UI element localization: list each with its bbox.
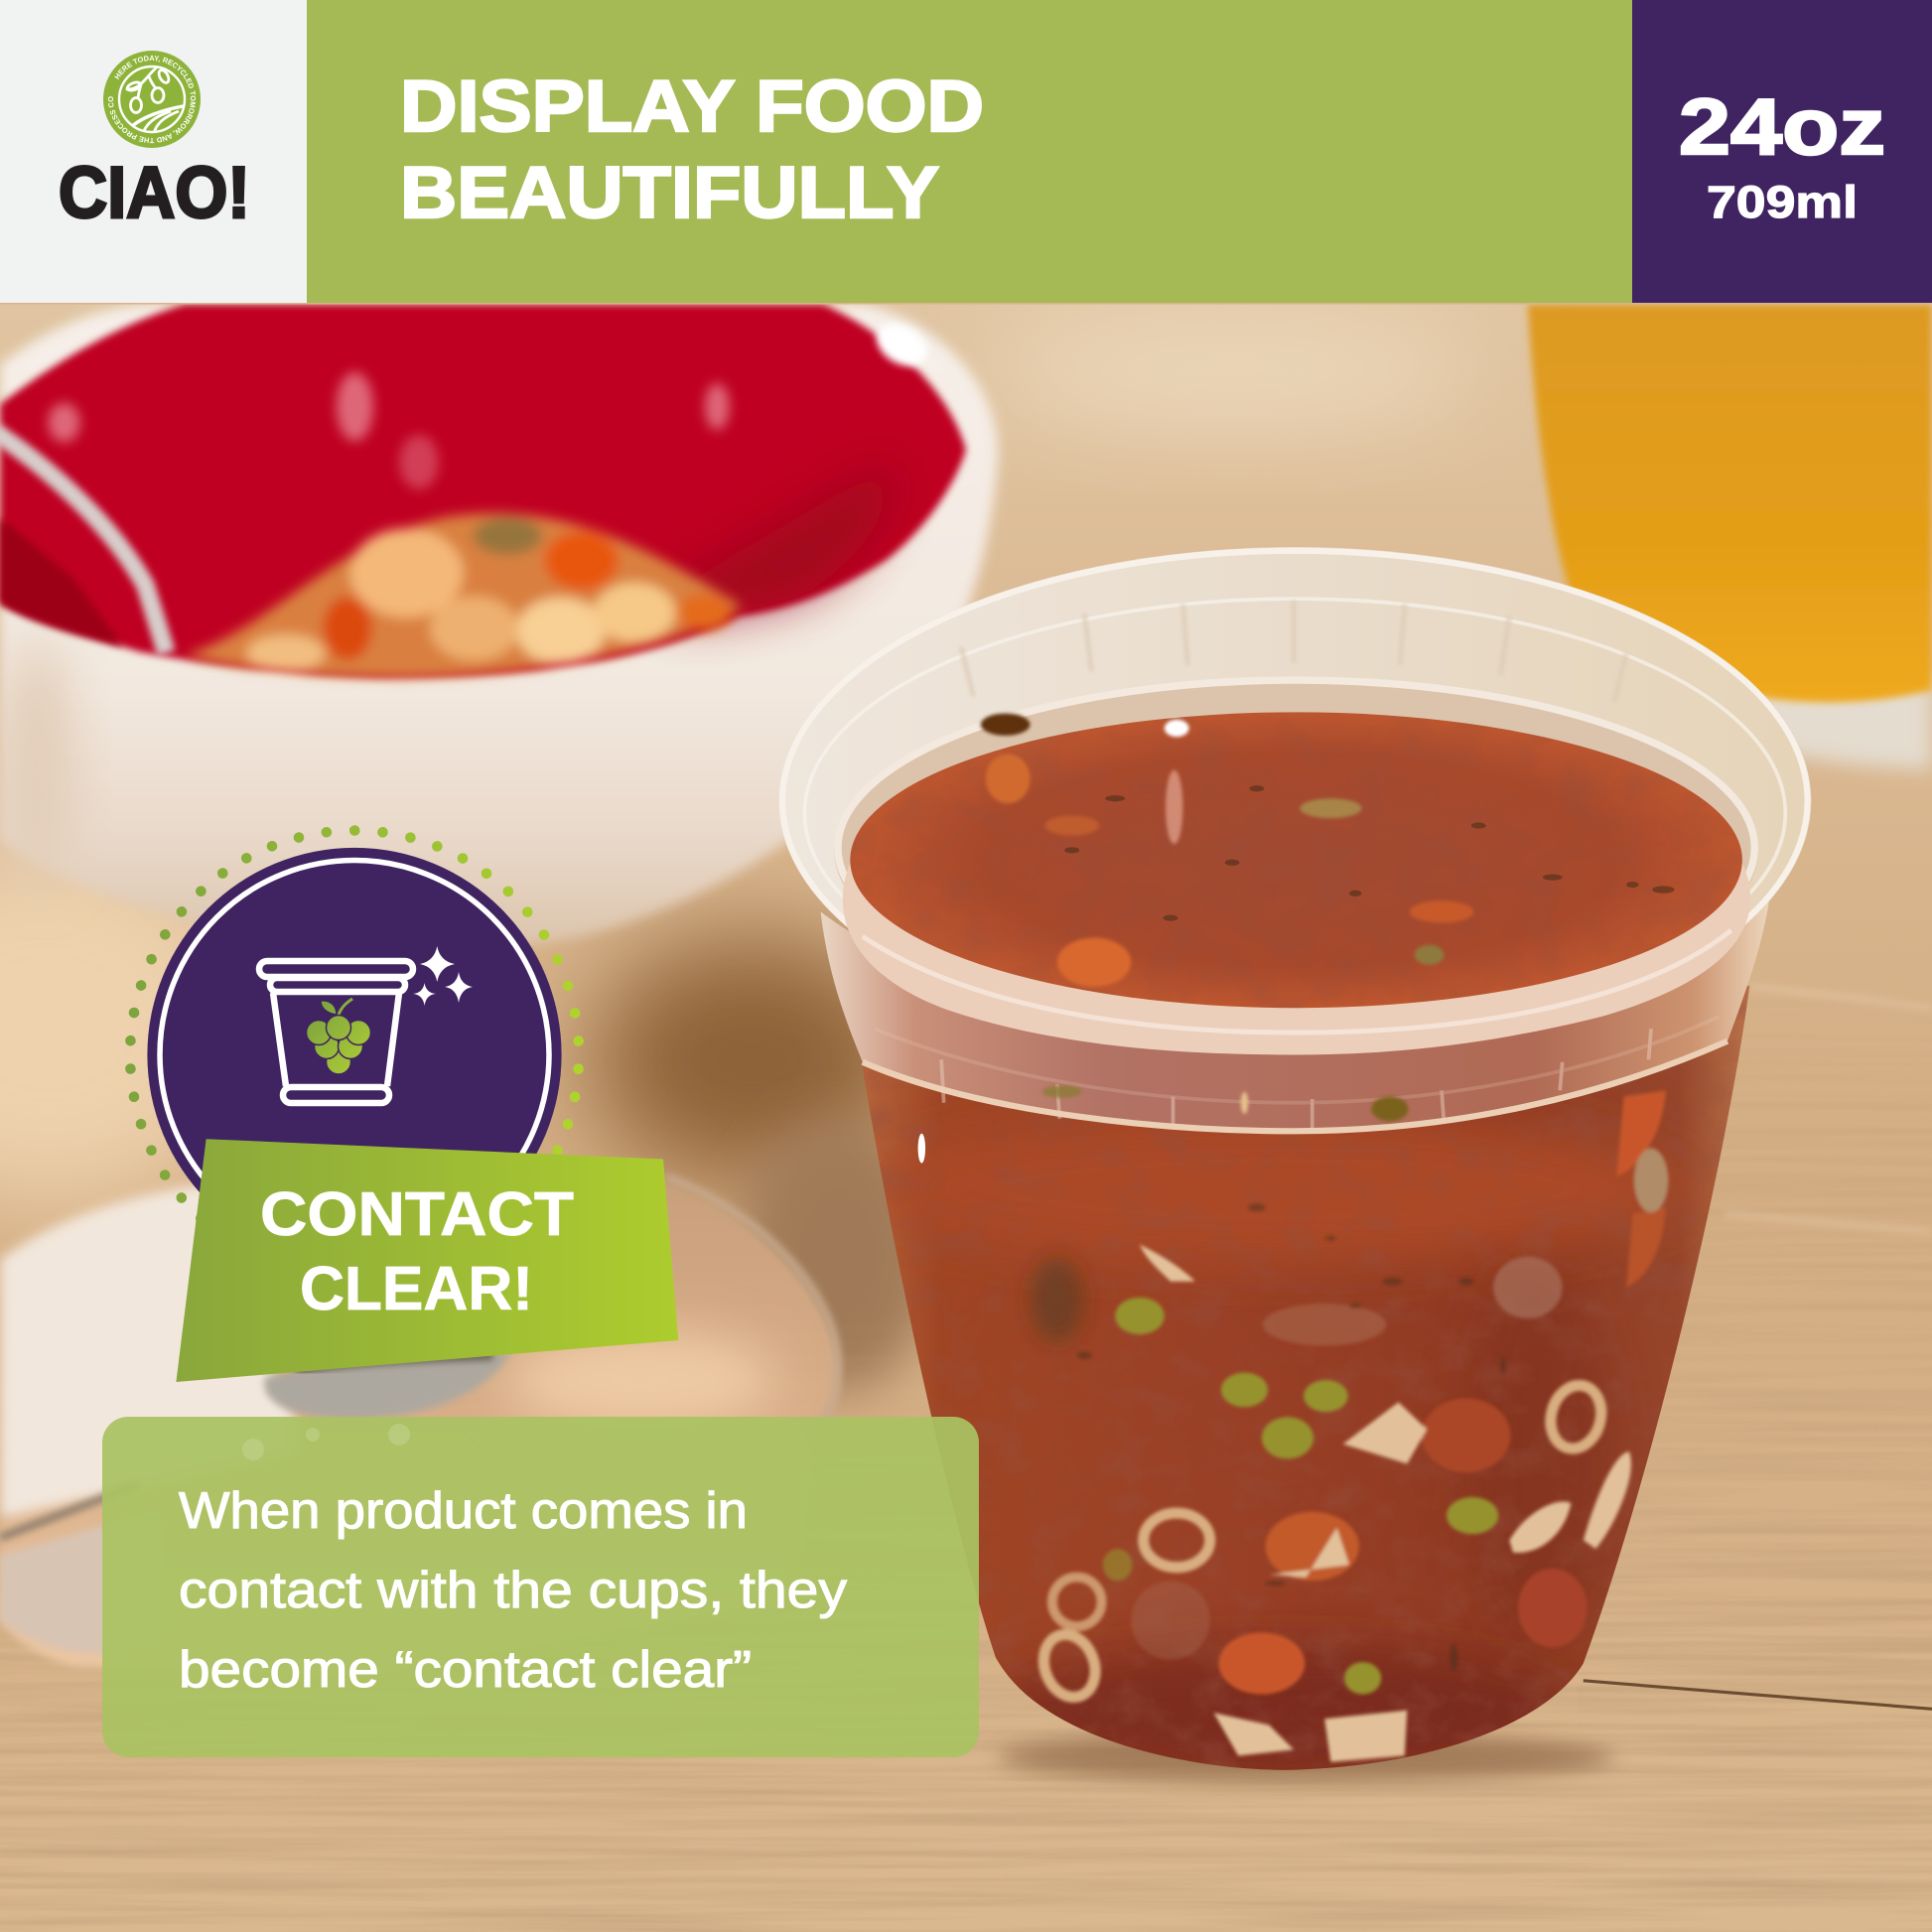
soup in bowl xyxy=(185,513,742,678)
sparkles xyxy=(413,946,473,1006)
cup body xyxy=(850,986,1749,1770)
size in ounces: 24oz xyxy=(1679,82,1885,171)
cup shadow xyxy=(998,1732,1614,1782)
cup outline xyxy=(259,961,413,1103)
juice glass xyxy=(1528,305,1932,770)
title line 2: BEAUTIFULLY xyxy=(400,153,939,233)
carrots xyxy=(1218,1090,1666,1694)
dotted ring xyxy=(116,817,593,1293)
soup surface details xyxy=(981,714,1473,987)
pasta pieces xyxy=(1131,1149,1668,1762)
icon: cup with grapes xyxy=(259,946,473,1103)
front lip xyxy=(843,863,1750,1054)
inner wall xyxy=(834,678,1758,1023)
soup contents xyxy=(850,986,1762,1780)
band ribs xyxy=(875,1017,1719,1131)
rim ribs xyxy=(961,600,1626,702)
brand name: CIAO! xyxy=(59,153,250,233)
header: logo panel xyxy=(0,0,307,303)
description line 2: contact with the cups, they xyxy=(179,1562,847,1619)
banner text line 2: CLEAR! xyxy=(300,1255,533,1323)
green banner xyxy=(176,1139,678,1382)
peas xyxy=(1103,1298,1498,1694)
bowl highlights xyxy=(48,372,730,489)
header: title panel xyxy=(307,0,1632,303)
grapes xyxy=(306,999,371,1074)
cup band xyxy=(821,899,1769,1131)
badge: contact clear xyxy=(116,817,678,1382)
logo badge xyxy=(103,51,201,148)
description panel xyxy=(102,1417,979,1757)
white inner ring xyxy=(160,860,549,1249)
title line 1: DISPLAY FOOD xyxy=(400,67,984,147)
white bowl xyxy=(0,305,998,950)
soup cup xyxy=(778,547,1811,1782)
lid and napkin xyxy=(0,1176,838,1676)
pasta rings xyxy=(1035,1380,1608,1705)
purple disc xyxy=(147,848,562,1262)
herb specks xyxy=(1077,1204,1506,1671)
bowl interior xyxy=(0,305,966,678)
lip highlight xyxy=(863,930,1731,1033)
banner text line 1: CONTACT xyxy=(260,1180,574,1249)
cup rim xyxy=(778,547,1811,1054)
description line 3: become “contact clear” xyxy=(179,1641,752,1699)
header: size panel xyxy=(1632,0,1932,303)
soup surface xyxy=(850,712,1742,1008)
surface herb specks xyxy=(1064,785,1675,921)
panel bokeh xyxy=(242,1424,410,1460)
band debris xyxy=(1042,1085,1409,1121)
spoon in bowl xyxy=(0,431,167,653)
description line 1: When product comes in xyxy=(179,1482,748,1540)
size in millilitres: 709ml xyxy=(1707,177,1858,227)
